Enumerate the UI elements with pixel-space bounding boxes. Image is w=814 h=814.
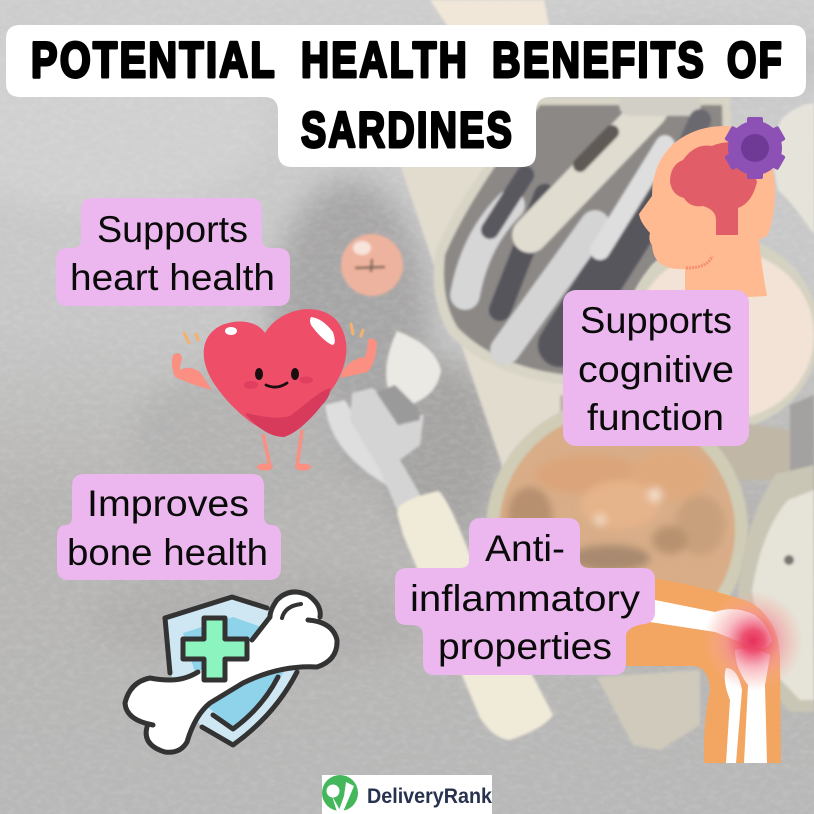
wood handle — [397, 491, 553, 740]
label: improves bone health: Improves — [87, 483, 249, 524]
can opener — [325, 400, 400, 490]
board between cans — [560, 395, 790, 480]
logo: DeliveryRank — [322, 775, 492, 814]
sardine can — [434, 97, 735, 400]
label: supports heart health: heart health — [70, 257, 275, 298]
icon: bone with shield and plus — [125, 592, 337, 752]
bay leaf — [386, 331, 441, 405]
label: improves bone health: bone health — [67, 532, 268, 573]
top right leaf and table — [774, 103, 814, 235]
orange fish can — [486, 399, 748, 661]
label: anti-inflammatory properties — [395, 518, 655, 675]
title text: BENEFITS — [492, 32, 706, 88]
label: supports cognitive function — [563, 290, 749, 446]
label: supports cognitive function: Supports — [580, 300, 732, 341]
title text: OF — [727, 32, 784, 88]
label: supports cognitive function: cognitive — [578, 349, 734, 390]
title text — [31, 32, 784, 158]
right corner can — [738, 465, 814, 712]
heart body — [204, 309, 346, 437]
sardines — [465, 105, 700, 365]
right sauce can — [625, 236, 814, 430]
icon: happy flexing heart — [172, 309, 377, 470]
shield — [165, 597, 297, 745]
label: anti-inflammatory properties: inflammatory — [410, 578, 641, 619]
wooden board — [430, 0, 550, 30]
title text: SARDINES — [301, 102, 514, 158]
label: supports cognitive function: function — [587, 397, 724, 438]
title text: HEALTH — [301, 32, 469, 88]
bone — [125, 592, 337, 752]
table darker patches — [0, 30, 814, 670]
wordmark: DeliveryRank — [367, 785, 492, 808]
title banner — [6, 25, 806, 167]
label: supports heart health: Supports — [97, 209, 248, 250]
label: improves bone health — [57, 474, 281, 580]
tomato — [341, 234, 403, 296]
label: anti-inflammatory properties: properties — [438, 626, 612, 667]
title text: POTENTIAL — [31, 32, 277, 88]
icon: brain in head with gear — [639, 117, 786, 300]
icon: green circle with spoon and fork — [322, 775, 358, 812]
legs — [263, 430, 302, 466]
icon: inflamed knee joint — [620, 576, 803, 763]
arms — [172, 353, 212, 390]
label: supports heart health — [56, 198, 290, 306]
plus sign — [183, 618, 247, 680]
label: anti-inflammatory properties: Anti- — [485, 528, 565, 569]
